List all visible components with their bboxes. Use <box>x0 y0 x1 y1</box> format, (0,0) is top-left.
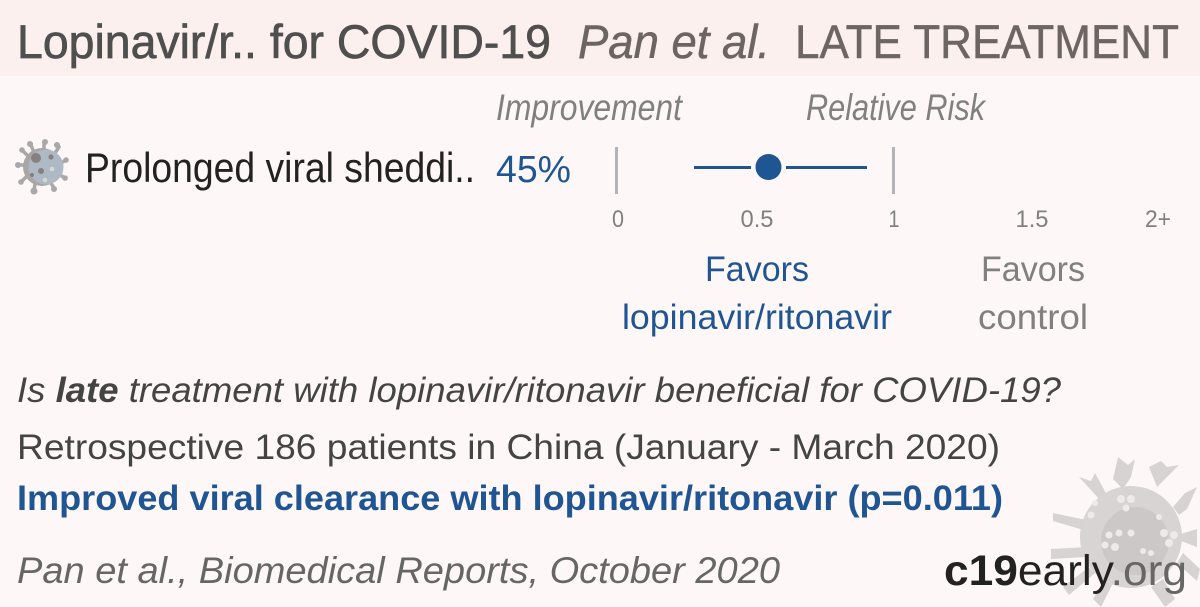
reference line at 0 <box>615 147 618 194</box>
axis labels: 0.5 <box>740 206 774 233</box>
study details: Retrospective 186 patients in China (January - March 2020) <box>17 428 1000 467</box>
title: drug and condition: Lopinavir/r.. for COVID-19 <box>17 15 551 68</box>
forest plot <box>612 147 1171 233</box>
axis labels: 0 <box>612 206 624 233</box>
favors treatment label <box>622 250 892 337</box>
site logo: c19early.org <box>944 547 1187 595</box>
citation: Pan et al., Biomedical Reports, October 2020 <box>17 550 780 591</box>
favors control label <box>978 250 1088 337</box>
reference line at 1 <box>892 147 895 194</box>
favors treatment label: lopinavir/ritonavir <box>622 298 892 337</box>
column heading: improvement: Improvement <box>496 87 683 128</box>
axis labels <box>612 206 1171 233</box>
favors control label: control <box>978 298 1088 337</box>
outcome label: Prolonged viral sheddi.. <box>85 144 475 191</box>
point estimate <box>756 154 782 180</box>
header band <box>0 0 1200 76</box>
decorative virus watermark <box>1051 457 1200 607</box>
study question: Is late treatment with lopinavir/ritonavir beneficial for COVID-19? <box>17 371 1062 410</box>
improvement value: 45% <box>496 149 571 191</box>
favors treatment label: Favors <box>705 250 809 289</box>
title: treatment stage: LATE TREATMENT <box>795 15 1179 68</box>
favors control label: Favors <box>981 250 1085 289</box>
axis labels: 1 <box>888 206 900 233</box>
icon: small virus <box>15 139 69 194</box>
key finding: Improved viral clearance with lopinavir/ritonavir (p=0.011) <box>17 479 1003 518</box>
confidence interval <box>694 166 867 169</box>
title: study author: Pan et al. <box>578 15 770 68</box>
axis labels: 1.5 <box>1016 206 1048 233</box>
axis labels: 2+ <box>1145 206 1171 233</box>
column heading: relative risk: Relative Risk <box>806 87 987 128</box>
